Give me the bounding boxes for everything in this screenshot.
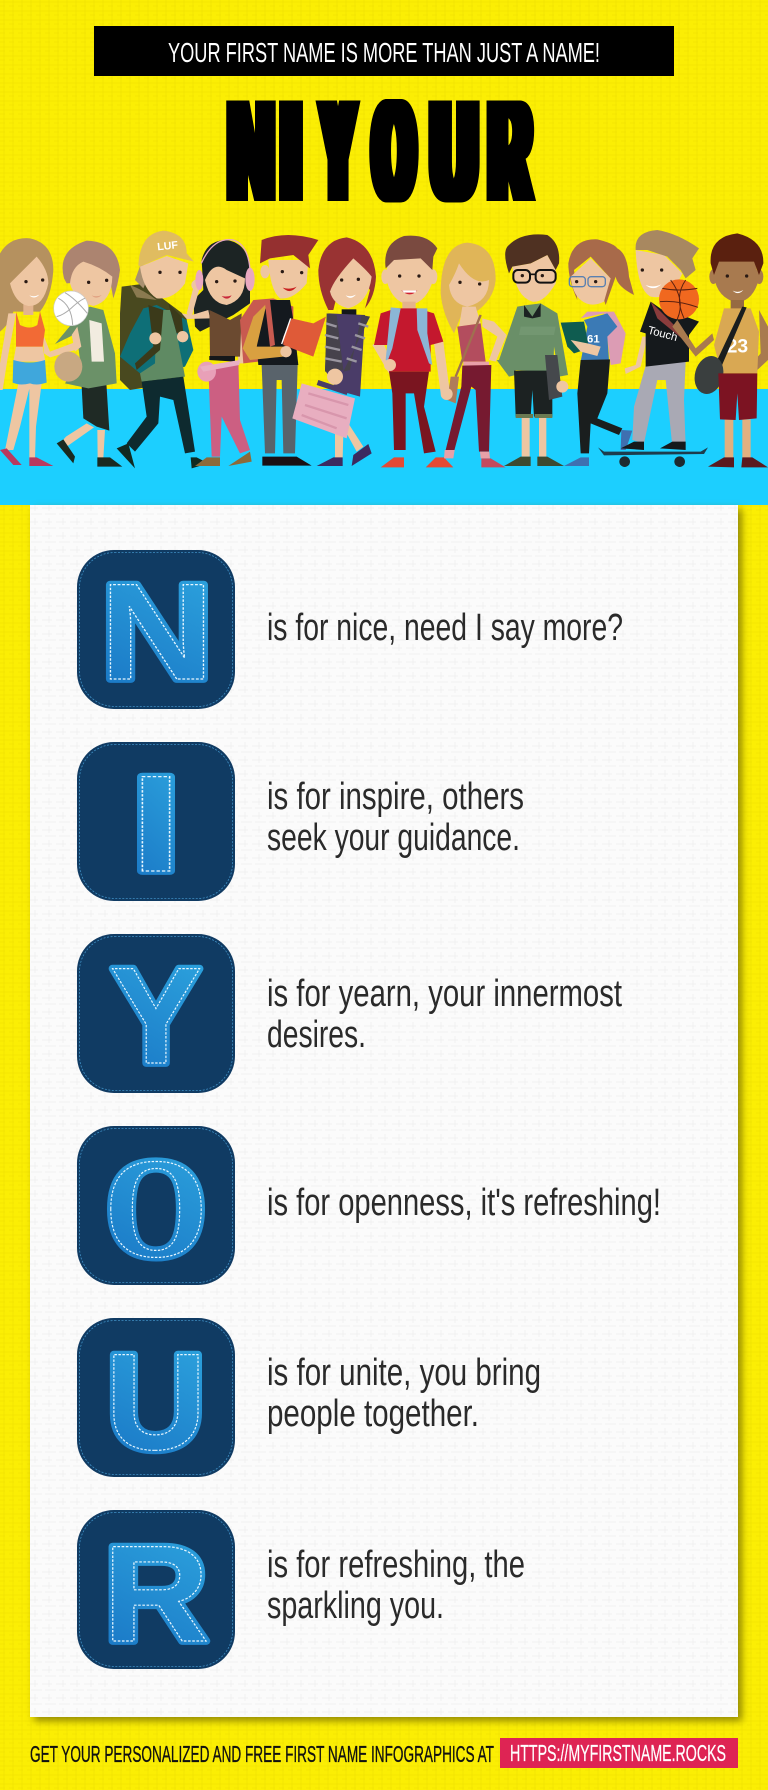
girl with pink headphones	[182, 240, 255, 466]
girl with ponytail, glasses and tablet	[561, 239, 634, 466]
row I: text: seek your guidance.	[267, 817, 520, 859]
row Y: letter tile: Y	[110, 940, 202, 1093]
row Y: text: is for yearn, your innermost	[267, 973, 622, 1015]
row R: text: sparkling you.	[267, 1585, 444, 1627]
row R: letter tile	[77, 1510, 235, 1671]
row Y: letter tile	[77, 934, 235, 1093]
row Y: text	[267, 973, 622, 1056]
illustration: group of students, right half	[372, 230, 768, 467]
row N: letter tile	[77, 550, 235, 709]
row R: text: is for refreshing, the	[267, 1544, 525, 1586]
name title NIYOUR: Y	[322, 69, 354, 232]
girl with ponytail, glasses and tablet: 61	[587, 334, 600, 346]
blonde girl with pink top	[441, 243, 507, 467]
row I: letter tile: I	[130, 747, 182, 900]
boy with cap and large backpack	[117, 231, 208, 468]
name title NIYOUR: I	[283, 69, 299, 232]
row U: text	[267, 1352, 541, 1435]
row U: text: is for unite, you bring	[267, 1352, 541, 1394]
illustration: group of students, left half	[0, 231, 376, 468]
top banner: black bar with tagline	[94, 26, 674, 76]
boy on skateboard with basketball: Touch	[646, 325, 679, 344]
icon: volleyball	[54, 291, 88, 326]
boy with glasses and green sweater	[497, 234, 568, 466]
white content panel	[30, 505, 738, 1717]
row U: letter tile: U	[105, 1326, 207, 1479]
girl with volleyball in green jacket	[54, 241, 122, 467]
name title NIYOUR: N	[231, 69, 271, 232]
row I: text	[267, 776, 524, 859]
row I: text: is for inspire, others	[267, 776, 524, 818]
name title NIYOUR: O	[374, 69, 414, 232]
name title NIYOUR: R	[490, 69, 530, 232]
boy with red hair reading book	[240, 235, 326, 466]
boy on skateboard with basketball	[598, 230, 714, 467]
name title NIYOUR: U	[432, 69, 476, 232]
boy with cap and large backpack: LUF	[157, 239, 179, 253]
girl in orange top	[0, 238, 81, 466]
boy with curly hair and yellow tank top	[690, 233, 768, 467]
name title NIYOUR	[226, 69, 536, 232]
row O: letter tile: O	[104, 1129, 208, 1287]
row U: letter tile	[77, 1318, 235, 1479]
row N: letter tile: N	[100, 556, 214, 709]
row R: letter tile: R	[103, 1517, 209, 1671]
row R: text	[267, 1544, 525, 1627]
row U: letter tile: U	[105, 1326, 207, 1479]
row O: text: is for openness, it's refreshing!	[267, 1182, 661, 1224]
row I: letter tile	[77, 742, 235, 901]
row N: text: is for nice, need I say more?	[267, 607, 623, 649]
row O: letter tile: O	[104, 1129, 208, 1287]
row N: letter tile: N	[100, 556, 214, 709]
boy with curly hair and yellow tank top: 23	[727, 337, 748, 358]
row R: letter tile: R	[103, 1517, 209, 1671]
row I: letter tile: I	[130, 747, 182, 900]
icon: basketball	[659, 279, 699, 319]
row U: text: people together.	[267, 1393, 479, 1435]
blue ground band	[0, 389, 768, 505]
girl with red hair carrying pink bag	[292, 237, 376, 466]
row Y: text: desires.	[267, 1014, 366, 1056]
row Y: letter tile: Y	[110, 940, 202, 1093]
row O: letter tile	[77, 1126, 235, 1287]
boy with red shirt and blue backpack straps	[372, 236, 453, 467]
